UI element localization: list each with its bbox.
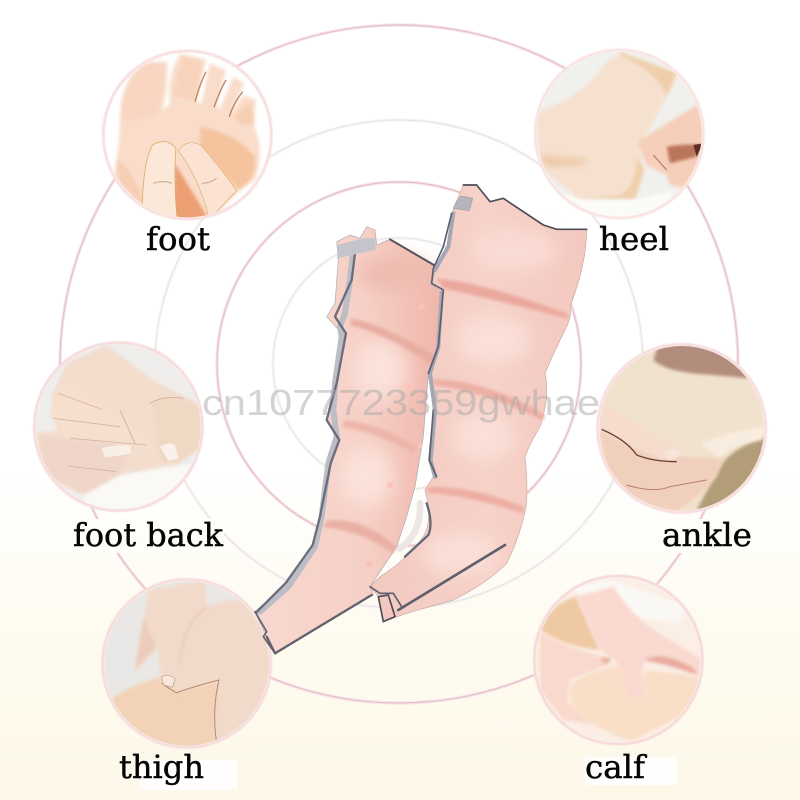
label backing: foot back — [72, 519, 224, 553]
watermark: cn1077723359gwhae — [202, 382, 600, 423]
label backing: thigh — [140, 760, 237, 790]
label backing: calf — [585, 757, 677, 785]
label: ankle: ankle — [662, 516, 752, 554]
right leg wrap — [370, 185, 587, 622]
panel: foot back massage photo — [32, 340, 204, 512]
panel: ankle massage photo — [593, 340, 770, 517]
panel: thigh massage photo — [100, 577, 277, 750]
illustration: pair of inflatable leg wraps — [255, 185, 587, 653]
left leg wrap — [255, 227, 442, 653]
panel: heel massage photo — [533, 47, 707, 220]
label: calf: calf — [585, 748, 647, 786]
label: heel: heel — [599, 220, 669, 258]
label: foot: foot — [146, 220, 210, 258]
label: thigh: thigh — [119, 748, 204, 786]
panel: foot massage photo — [103, 51, 271, 223]
label: foot back: foot back — [73, 516, 224, 554]
concentric rings — [60, 25, 738, 703]
panel: calf massage photo — [530, 573, 707, 747]
inflation connectors — [366, 303, 425, 567]
label backing: ankle — [660, 519, 756, 553]
